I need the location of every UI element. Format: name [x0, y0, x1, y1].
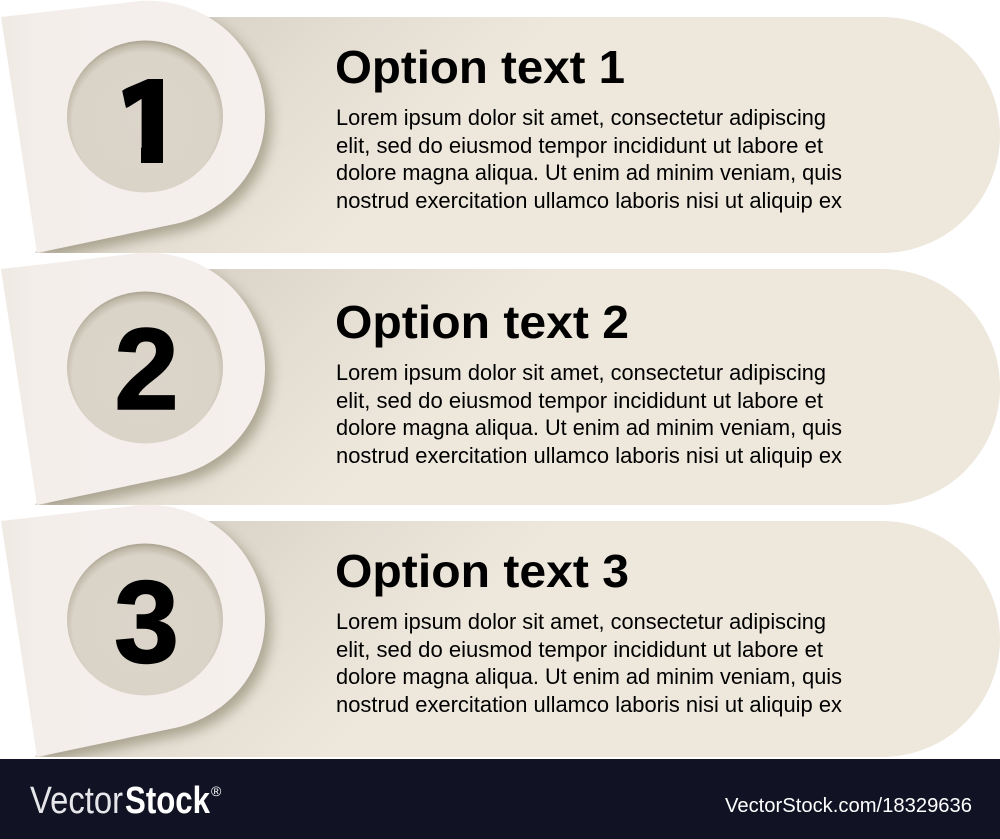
option 2	[1, 253, 1000, 512]
tab shadow 1	[36, 17, 278, 253]
footer url: VectorStock.com/18329636	[725, 795, 972, 817]
body text 3: elit, sed do eiusmod tempor incididunt ut labore et	[336, 637, 823, 662]
body text 3: dolore magna aliqua. Ut enim ad minim veniam, quis	[336, 664, 842, 689]
number 3: 3	[114, 556, 179, 687]
tab shadow 3	[36, 521, 278, 757]
number well 1	[67, 40, 223, 192]
body text 1: nostrud exercitation ullamco laboris nisi ut aliquip ex	[336, 188, 842, 213]
footer logo: ®	[211, 783, 222, 799]
body text 1: Lorem ipsum dolor sit amet, consectetur adipiscing	[336, 105, 826, 130]
body text 3	[336, 609, 842, 717]
body text 2	[336, 360, 842, 468]
heading 1: Option text 1	[335, 41, 625, 93]
tab shadow 2	[36, 269, 278, 505]
footer logo: Vector	[30, 780, 123, 822]
heading 2: Option text 2	[335, 296, 629, 348]
band 3	[35, 521, 1000, 757]
band 2	[35, 269, 1000, 505]
number 1: 1	[116, 53, 184, 189]
body text 2: Lorem ipsum dolor sit amet, consectetur adipiscing	[336, 360, 826, 385]
body text 1: dolore magna aliqua. Ut enim ad minim veniam, quis	[336, 160, 842, 185]
tab 1	[1, 1, 265, 253]
heading 3: Option text 3	[335, 545, 629, 597]
body text 2: dolore magna aliqua. Ut enim ad minim veniam, quis	[336, 415, 842, 440]
number well 3	[67, 544, 223, 696]
tab 2	[1, 253, 265, 505]
band 1	[35, 17, 1000, 253]
option 1	[1, 1, 1000, 260]
body text 3: Lorem ipsum dolor sit amet, consectetur adipiscing	[336, 609, 826, 634]
body text 2: elit, sed do eiusmod tempor incididunt ut labore et	[336, 388, 823, 413]
footer bar	[0, 759, 1000, 839]
body text 2: nostrud exercitation ullamco laboris nisi ut aliquip ex	[336, 443, 842, 468]
footer logo	[30, 780, 222, 822]
option 3	[1, 505, 1000, 764]
body text 3: nostrud exercitation ullamco laboris nisi ut aliquip ex	[336, 692, 842, 717]
tab 3	[1, 505, 265, 757]
footer logo: Stock	[125, 780, 211, 822]
body text 1: elit, sed do eiusmod tempor incididunt ut labore et	[336, 133, 823, 158]
number well 2	[67, 292, 223, 444]
number 2: 2	[114, 304, 179, 434]
body text 1	[336, 105, 842, 213]
